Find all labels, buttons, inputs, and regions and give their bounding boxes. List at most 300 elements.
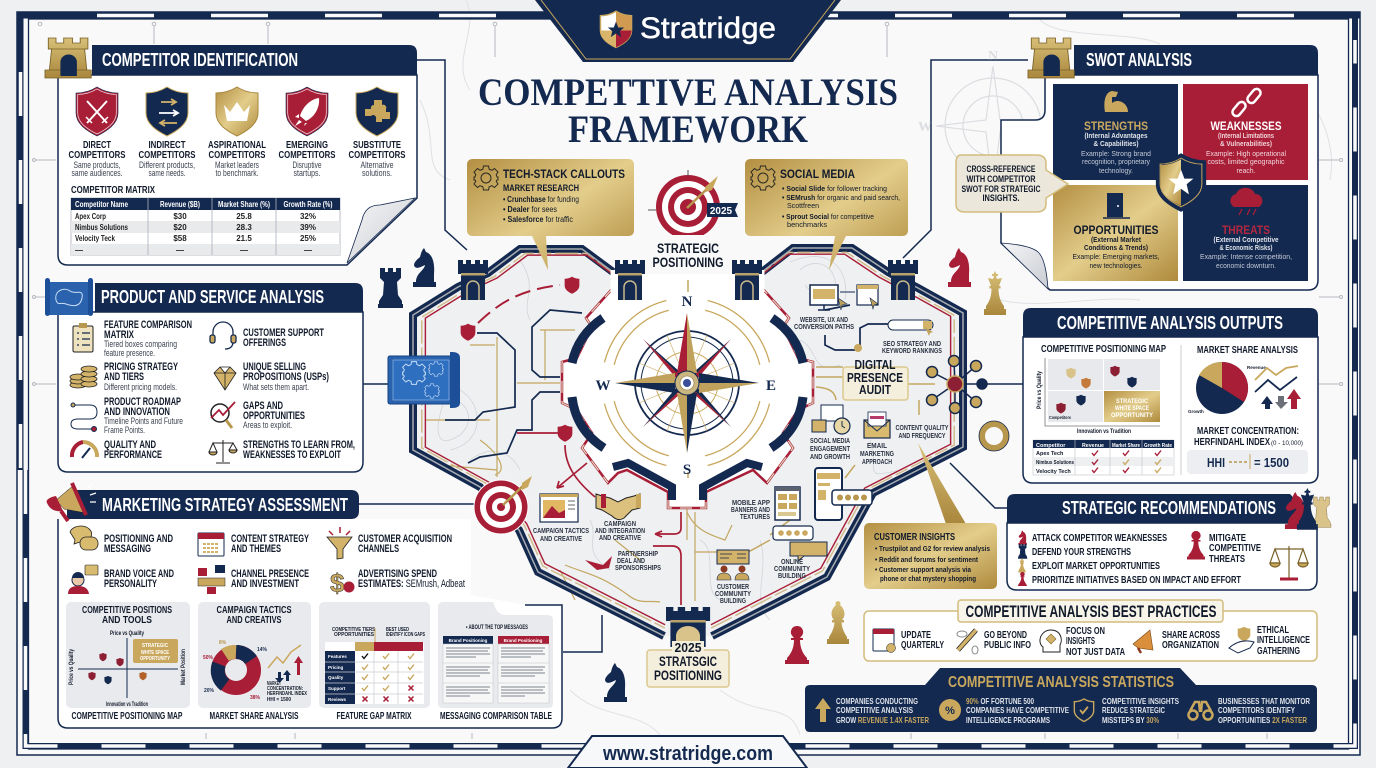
competitor type descriptions: Disruptive [292, 160, 322, 170]
text: positioning and messaging: MESSAGING [104, 543, 151, 555]
competitor matrix table: 25% [300, 234, 316, 243]
positioning map: Revenue [1082, 443, 1104, 449]
text: usp: PROPOSITIONS (USPs) [243, 371, 329, 383]
text: customer acquisition: CHANNELS [358, 543, 399, 555]
market share: MARKET SHARE ANALYSIS [1197, 345, 1298, 356]
competitor matrix table: 32% [300, 212, 316, 221]
social label [810, 436, 850, 461]
callout: cross reference: SWOT FOR STRATEGIC [962, 184, 1041, 194]
partnership label: SPONSORSHIPS [615, 563, 661, 572]
market share: HHI [1207, 455, 1225, 470]
card: positioning map: Price vs Quality [110, 631, 144, 637]
card: feature gap: BEST USED [386, 627, 409, 633]
mitigate threats: THREATS [1209, 553, 1245, 565]
faint compass letters: W [918, 120, 932, 135]
icon: castle [1028, 38, 1074, 78]
quadrant: weaknesses: WEAKNESSES [1210, 119, 1282, 133]
icon: logo shield [600, 11, 632, 48]
callout: cross reference: CROSS-REFERENCE [966, 164, 1036, 174]
card: feature gap [319, 602, 430, 708]
competitor matrix table: $30 [173, 212, 187, 221]
text: advertising spend [358, 568, 465, 590]
compass letters: W [596, 378, 610, 394]
compass [596, 280, 776, 478]
text: content strategy: AND THEMES [231, 543, 281, 555]
connector lines [359, 60, 1028, 652]
card: campaign tactics: HERFINDAHL INDEX [267, 691, 308, 697]
quadrant: strengths: recognition, proprietary [1082, 157, 1150, 166]
competitor type labels [68, 139, 406, 161]
online community label [774, 557, 810, 580]
text: gaps: GAPS AND [243, 400, 283, 412]
text: quality: QUALITY AND [104, 439, 156, 451]
quadrant: threats: economic downturn. [1216, 261, 1276, 270]
customer insights callout: • Customer support analysis via [875, 565, 972, 574]
text: positioning and messaging [104, 533, 173, 555]
callout text: benchmarks [787, 220, 827, 229]
text: feature comparison: feature presence. [104, 348, 155, 358]
seo label: SEO STRATEGY AND [883, 339, 941, 348]
positioning map: Market Share [1112, 443, 1140, 449]
stat: binoculars text: BUSINESSES THAT MONITOR [1218, 696, 1310, 706]
text: content strategy [231, 533, 310, 555]
digital presence audit: DIGITAL [854, 357, 896, 372]
red bird icon [585, 556, 612, 570]
recommendation list [1018, 530, 1241, 586]
map roads: navy [445, 305, 888, 463]
card: campaign tactics: CONCENTRATION: [267, 686, 303, 692]
fortress map ground [413, 248, 963, 636]
trend arrows [268, 645, 301, 668]
practice: share across [1133, 629, 1220, 653]
callout: cross reference: WITH COMPETITOR [966, 174, 1036, 184]
icon: checklist [73, 323, 93, 352]
card: feature gap: IDENTIFY ICON GAPS [386, 632, 425, 638]
content quality label: AND FREQUENCY [898, 431, 946, 440]
icon: dollar [330, 568, 354, 598]
quadrant: weaknesses: costs, limited geographic [1208, 157, 1285, 166]
text: usp [243, 361, 329, 392]
competitor type descriptions: Alternative [360, 160, 394, 170]
donut chart [218, 652, 254, 688]
callout text: Scottfreen [787, 201, 819, 210]
compass letters [596, 294, 776, 478]
competitor matrix table: — [75, 246, 83, 255]
card captions [72, 711, 552, 722]
competitor matrix table: Growth Rate (%) [284, 200, 333, 209]
practice: share across: ORGANIZATION [1162, 639, 1219, 651]
central shield [1157, 155, 1205, 210]
callout: social media [745, 159, 908, 270]
card: positioning map: WHITE SPACE [141, 650, 170, 656]
mobile app label: BANNERS AND [731, 505, 770, 514]
faint compass letters: N [988, 49, 998, 64]
stat: growth: GROW REVENUE 1.4X FASTER [836, 715, 929, 725]
card: feature gap: OPPORTUNITIES [334, 632, 374, 638]
compass letters: N [682, 294, 693, 310]
quadrant: threats: Example: Intense competition, [1200, 252, 1292, 261]
practice: ethical intelligence: INTELLIGENCE [1257, 634, 1310, 646]
card captions: COMPETITIVE POSITIONING MAP [72, 711, 183, 722]
callout text: • Dealer for sees [503, 205, 557, 214]
competitor type labels: COMPETITORS [278, 149, 336, 161]
mitigate threats: COMPETITIVE [1209, 542, 1261, 554]
competitor matrix table: — [240, 246, 248, 255]
card: feature gap: Support [328, 686, 346, 691]
email label: MARKETING [860, 449, 894, 458]
chess pieces [378, 248, 1009, 702]
competitor type descriptions: same audiences. [72, 168, 122, 178]
text: gaps: OPPORTUNITIES [243, 410, 305, 422]
website label [794, 315, 854, 331]
text: feature comparison: MATRIX [104, 329, 135, 341]
quadrant: weaknesses: & Vulnerabilities) [1220, 139, 1272, 148]
website footer tab: www.stratridge.com [602, 743, 773, 765]
strategic positioning label [652, 241, 724, 270]
competitor type descriptions: same needs. [148, 168, 186, 178]
trend chart [1255, 366, 1298, 392]
text: pricing strategy: PRICING STRATEGY [104, 361, 179, 373]
customer insights callout: CUSTOMER INSIGHTS [874, 532, 955, 543]
quadrant: weaknesses: reach. [1236, 166, 1256, 175]
practice: focus on insights: INSIGHTS [1066, 635, 1095, 647]
text: customer acquisition: CUSTOMER ACQUISITION [358, 533, 452, 545]
practice: update quarterly: QUARTERLY [901, 639, 944, 651]
callout text: TECH-STACK CALLOUTS [503, 167, 625, 181]
card: campaign tactics: 14% [257, 647, 268, 653]
email label: APPROACH [862, 457, 892, 466]
competitor matrix table: $20 [173, 223, 187, 232]
hub network [926, 356, 987, 414]
market share: Revenue [1247, 365, 1266, 370]
icon: chess group [1285, 488, 1331, 530]
text: strengths: WEAKNESSES TO EXPLOIT [243, 449, 341, 461]
quadrant: weaknesses: Example: High operational [1206, 149, 1286, 158]
card: feature gap: Pricing [328, 665, 344, 670]
text: channel presence [231, 568, 309, 590]
quadrant: strengths: Example: Strong brand [1081, 149, 1151, 158]
seo search bar [854, 320, 933, 352]
text: product roadmap: Timeline Points and Future [104, 416, 183, 426]
competitor type descriptions: Same products, [74, 160, 120, 170]
customer insights pointer [918, 443, 966, 524]
target marker [474, 476, 532, 534]
panel: competitive analysis outputs [1023, 308, 1318, 483]
online community label: ONLINE [781, 557, 803, 566]
customer community label [715, 582, 751, 605]
callout text: • Salesforce for traffic [503, 215, 573, 224]
campaign tactics label: CAMPAIGN TACTICS [533, 526, 589, 535]
competitor matrix table: Apex Corp [75, 212, 106, 221]
stat: growth [815, 696, 929, 725]
phone icon [815, 468, 872, 520]
content quality label [896, 423, 948, 440]
text: customer support: CUSTOMER SUPPORT [243, 327, 324, 339]
card: positioning map: STRATEGIC [142, 643, 168, 649]
website footer tab [568, 736, 807, 768]
card captions: MARKET SHARE ANALYSIS [210, 711, 299, 722]
top target with 2025 banner [648, 170, 738, 239]
card: campaign tactics: 38% [250, 695, 261, 701]
positioning map: Competitors [1049, 415, 1071, 420]
compass diagonal points [643, 339, 731, 427]
practice: focus on insights: FOCUS ON [1066, 625, 1105, 637]
social media icon [812, 405, 850, 434]
header badge with logo [535, 0, 841, 62]
website label: CONVERSION PATHS [794, 322, 854, 331]
stat: fortune 500: 90% OF FORTUNE 500 [966, 696, 1034, 706]
heading [95, 283, 363, 312]
bottom tower label: POSITIONING [654, 668, 722, 683]
contour lines [435, 256, 900, 620]
partnership label [615, 549, 661, 572]
card: feature gap: COMPETITIVE TIERS [332, 627, 375, 633]
positioning map: Growth Rate [1144, 443, 1172, 449]
competitor matrix table: 28.3 [236, 223, 252, 232]
map roads: red [478, 285, 681, 605]
title: FRAMEWORK [568, 108, 809, 151]
competitor matrix table: — [304, 246, 312, 255]
card: messaging table: Brand Positioning [504, 638, 543, 643]
text: strengths: STRENGTHS TO LEARN FROM, [243, 439, 355, 451]
panel: marketing strategy assessment [47, 483, 562, 728]
blueprint icon [388, 352, 460, 408]
email icon [864, 412, 890, 438]
stat: fortune 500: COMPANIES HAVE COMPETITIVE [966, 705, 1069, 715]
card: positioning map: Market Position [181, 649, 187, 685]
card: feature gap: Quality [328, 675, 344, 680]
top target with 2025 banner: 2025 [710, 206, 733, 217]
practice: share across: SHARE ACROSS [1162, 629, 1220, 641]
card: positioning map: COMPETITIVE POSITIONS [82, 605, 172, 616]
competitor type labels: INDIRECT [148, 139, 186, 151]
icon: gear [474, 166, 498, 190]
seo label: KEYWORD RANKINGS [882, 346, 942, 355]
stat: fortune 500 [939, 696, 1069, 725]
heading [92, 45, 417, 75]
stat: missteps: COMPETITIVE INSIGHTS [1102, 696, 1179, 706]
stat: fortune 500: % [945, 705, 955, 717]
faint compass watermark [936, 66, 1050, 190]
campaign tactics label [533, 526, 589, 543]
quadrant: threats: THREATS [1222, 223, 1270, 237]
seo label [882, 339, 942, 355]
panel: competitor identification [45, 38, 417, 265]
competitor matrix table: Revenue ($B) [160, 200, 200, 209]
market share: Growth [1188, 409, 1204, 414]
positioning map: OPPORTUNITY [1111, 412, 1154, 419]
competitor type labels: COMPETITORS [68, 149, 126, 161]
quadrant: threats: & Economic Risks) [1220, 243, 1273, 252]
stat: binoculars [1188, 702, 1212, 720]
heading [958, 600, 1223, 622]
competitor matrix table: Competitor Name [75, 200, 128, 209]
compass letters: E [766, 378, 776, 394]
heading: SWOT ANALYSIS [1086, 50, 1192, 70]
shield: indirect [146, 87, 188, 136]
competitor type descriptions: Different products, [139, 160, 195, 170]
practice: focus on insights: NOT JUST DATA [1066, 646, 1125, 658]
shield: substitute [356, 87, 398, 136]
heading: COMPETITIVE ANALYSIS OUTPUTS [1057, 313, 1283, 333]
central keep [562, 272, 813, 508]
competitor matrix heading: COMPETITOR MATRIX [71, 185, 155, 196]
stat: growth: COMPETITIVE ANALYSIS [836, 705, 913, 715]
competitor type descriptions: Market leaders [215, 160, 259, 170]
text: product roadmap: AND INNOVATION [104, 406, 170, 418]
panel: strategic recommendations [1007, 488, 1331, 590]
callout text [503, 167, 625, 224]
callout: cross reference: INSIGHTS. [982, 193, 1020, 203]
icon: channels [198, 565, 225, 594]
competitor matrix table: 21.5 [236, 234, 252, 243]
text: quality: PERFORMANCE [104, 449, 162, 461]
competitor matrix table: Velocity Teck [75, 234, 115, 243]
card: campaign tactics: CAMPAIGN TACTICS [216, 605, 292, 616]
social label: SOCIAL MEDIA [810, 436, 850, 445]
card: campaign tactics: 20% [204, 688, 215, 694]
competitor matrix table: 25.8 [236, 212, 252, 221]
market share [1187, 345, 1308, 474]
practice: ethical intelligence [1229, 624, 1310, 657]
recommendation list: PRIORITIZE INITIATIVES BASED ON IMPACT AND EFFORT [1032, 574, 1241, 586]
quadrant: strengths: (Internal Advantages [1084, 131, 1148, 140]
card: campaign tactics: 50% [203, 655, 214, 661]
practice: update quarterly: UPDATE [901, 629, 931, 641]
right map: website icon [810, 285, 878, 310]
text: advertising spend: ESTIMATES: SEMrush, Adbeat [358, 578, 465, 590]
heading: COMPETITOR IDENTIFICATION [102, 50, 298, 70]
competitor type labels: SUBSTITUTE [353, 139, 401, 151]
shield: aspirational [216, 87, 258, 136]
stat: missteps: MISSTEPS BY 30% [1102, 715, 1159, 725]
positioning map: Price vs Quality [1037, 370, 1043, 409]
compass gold arcs [604, 300, 770, 466]
card: campaign tactics [198, 602, 311, 708]
market share: (0 - 10,000) [1271, 441, 1303, 447]
card: feature gap: Reviews [328, 697, 347, 702]
card: campaign tactics: 8% [219, 640, 227, 646]
strategic positioning label: POSITIONING [652, 255, 724, 270]
panel: product and service analysis [45, 278, 363, 472]
icon: gear [751, 166, 775, 190]
content quality label: CONTENT QUALITY [896, 423, 948, 432]
text: strengths [243, 439, 355, 461]
icon: scales [1270, 546, 1308, 579]
market share: HERFINDAHL INDEX [1194, 437, 1270, 448]
social label: AND GROWTH [810, 452, 850, 461]
positioning map [1033, 344, 1174, 475]
customer community label: COMMUNITY [715, 589, 751, 598]
text: customer support: OFFERINGS [243, 337, 286, 349]
text: brand voice: PERSONALITY [104, 578, 158, 590]
quadrant: strengths: STRENGTHS [1084, 119, 1148, 133]
text: gaps [243, 400, 305, 430]
text: feature comparison [104, 319, 192, 358]
stat: binoculars text [1218, 696, 1310, 725]
digital presence audit: PRESENCE [847, 370, 903, 385]
competitor type descriptions [72, 160, 394, 178]
icon: funnel [327, 527, 352, 559]
positioning map: WHITE SPACE [1115, 405, 1149, 412]
mobile app label: MOBILE APP [732, 498, 770, 507]
card captions: FEATURE GAP MATRIX [336, 711, 412, 722]
icon: headset [210, 322, 236, 349]
icon: roadmap [71, 403, 97, 432]
callout text: • SEMrush for organic and paid search, [782, 193, 900, 202]
handshake label: CAMPAIGN [604, 519, 636, 528]
icon: magnifier chart [211, 402, 235, 428]
handshake label: AND INTEGRATION [595, 526, 645, 535]
central fortress map [388, 248, 987, 647]
quadrant: strengths: technology. [1099, 166, 1133, 175]
icon: diamond [214, 367, 236, 390]
competitor type labels: EMERGING [286, 139, 328, 151]
heading: COMPETITIVE ANALYSIS STATISTICS [948, 674, 1174, 691]
text: pricing strategy [104, 361, 179, 392]
outer wall left [413, 248, 963, 636]
card: positioning map [66, 602, 190, 708]
card: messaging table: • ABOUT THE TOP MESSAGES [466, 625, 528, 631]
practice: go beyond [957, 629, 1031, 654]
customer community label: BUILDING [720, 596, 746, 605]
callout text: • Crunchbase for funding [503, 195, 579, 204]
card: positioning map: OPPORTUNITY [140, 656, 171, 662]
text: usp: UNIQUE SELLING [243, 361, 306, 373]
quadrant: weaknesses: (Internal Limitations [1218, 131, 1274, 140]
shield: direct [76, 87, 118, 136]
icon: speech bubbles [70, 526, 98, 550]
quadrant: weaknesses [1183, 84, 1308, 180]
card: campaign tactics: HHI = 1500 [267, 697, 291, 703]
callout text: • Social Slide for follower tracking [782, 184, 887, 193]
card: positioning map: Innovation vs Tradition [106, 702, 148, 708]
mobile app label [731, 498, 770, 521]
partnership label: DEAL AND [617, 556, 645, 565]
text: feature comparison: FEATURE COMPARISON [104, 319, 192, 331]
competitor type labels: COMPETITORS [138, 149, 196, 161]
positioning map: Velocity Tech [1036, 469, 1071, 475]
stat: missteps [1074, 696, 1179, 725]
quadrant: opportunities: Example: Emerging markets, [1072, 252, 1160, 261]
practice: ethical intelligence: ETHICAL [1257, 624, 1289, 636]
competitor matrix table: — [176, 246, 184, 255]
icon: blueprint [45, 278, 93, 316]
text: advertising spend: ADVERTISING SPEND [358, 568, 437, 580]
callout text [780, 167, 900, 229]
partnership label: PARTNERSHIP [618, 549, 658, 558]
icon: dollar: $ [330, 568, 345, 598]
text: product roadmap [104, 396, 183, 435]
card captions: MESSAGING COMPARISON TABLE [440, 711, 552, 722]
competitor matrix table: Market Share (%) [218, 200, 270, 209]
positioning map: COMPETITIVE POSITIONING MAP [1041, 344, 1166, 355]
pie chart [1196, 362, 1248, 414]
icon: calendar [198, 533, 224, 556]
logo wordmark: Stratridge [640, 12, 776, 45]
website label: WEBSITE, UX AND [800, 315, 848, 324]
text: pricing strategy: Different pricing models. [104, 382, 177, 392]
practice: go beyond: GO BEYOND [984, 629, 1027, 641]
positioning map: Competitor [1036, 443, 1066, 449]
heading [1023, 308, 1318, 337]
quadrant: opportunities: new technologies. [1090, 261, 1142, 270]
heading [67, 490, 359, 519]
stat: fortune 500: INTELLIGENCE PROGRAMS [966, 715, 1050, 725]
text: brand voice [104, 568, 174, 590]
icon: scales [209, 440, 237, 463]
online community label: COMMUNITY [774, 564, 810, 573]
